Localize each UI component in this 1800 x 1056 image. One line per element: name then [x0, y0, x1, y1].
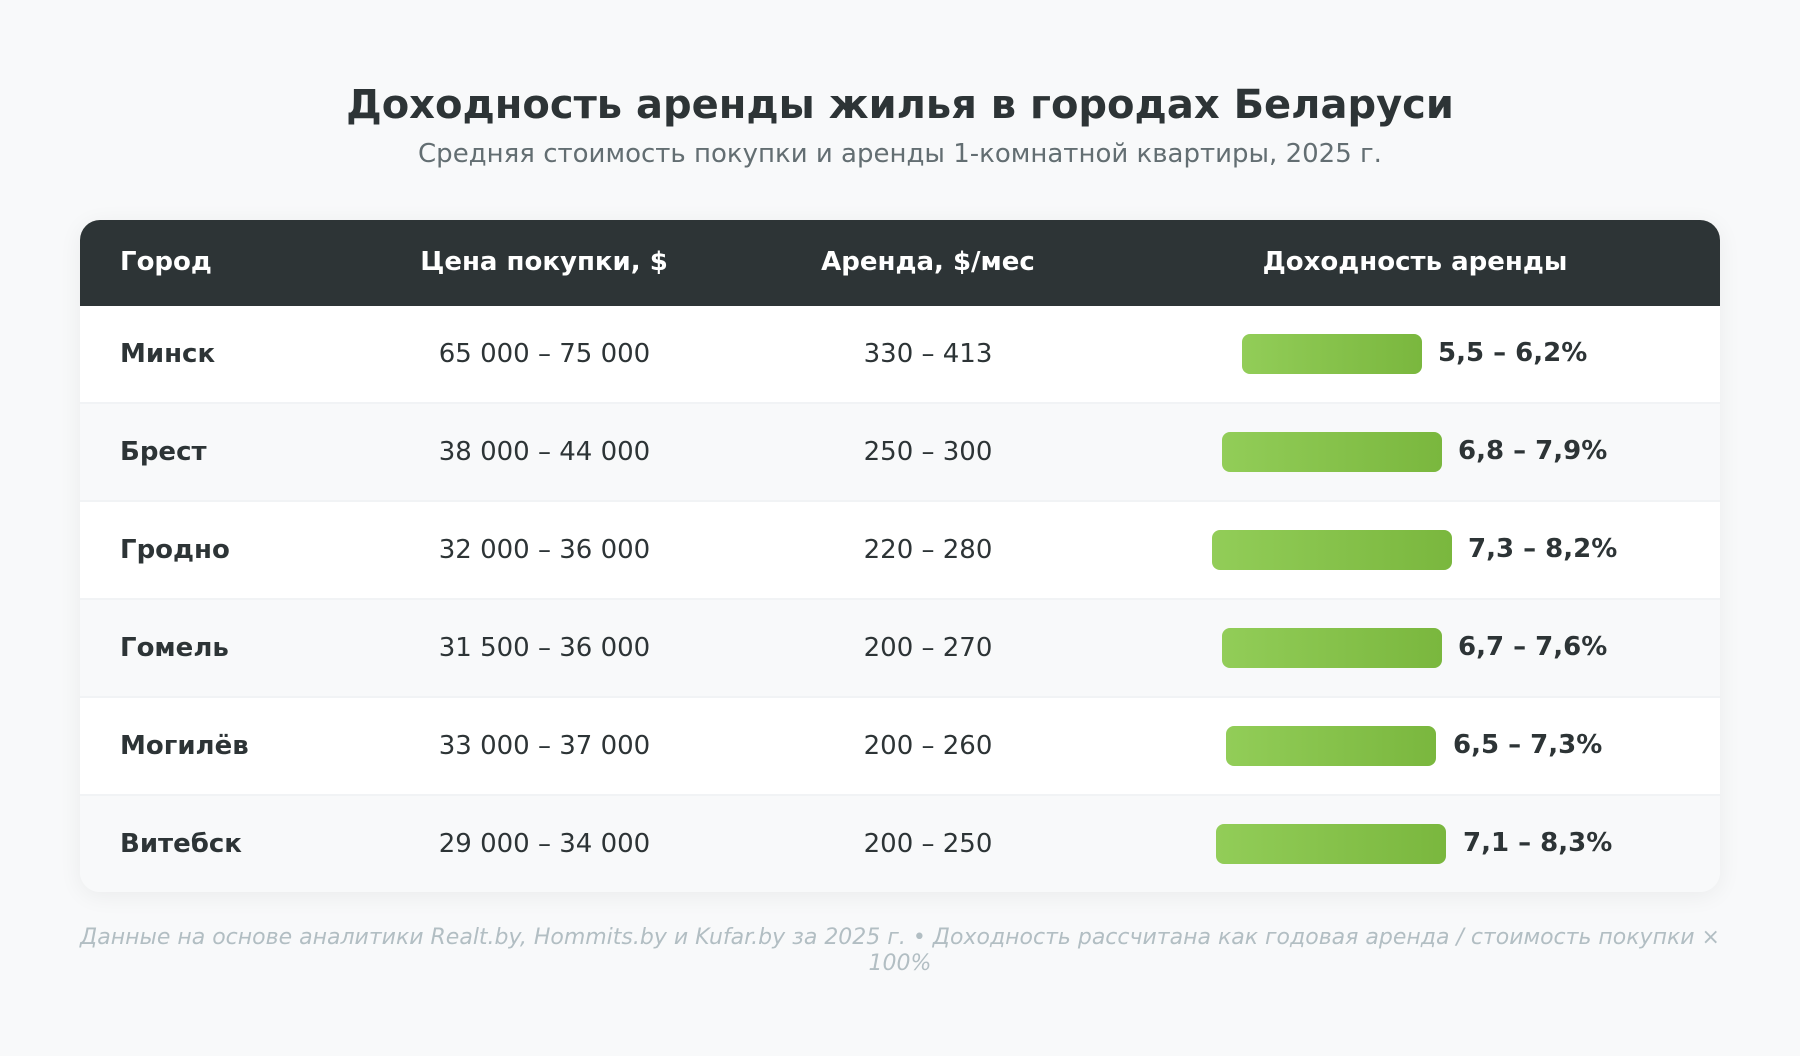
row: Могилёв: 200 – 260 — [864, 731, 992, 761]
row: Гродно: 32 000 – 36 000 — [439, 535, 650, 565]
row: Минск: 330 – 413 — [864, 339, 992, 369]
row: Брест: 250 – 300 — [864, 437, 992, 467]
column heading: purchase price: Цена покупки, $ — [420, 247, 668, 277]
row: Гомель: Гомель — [120, 633, 229, 663]
row: Гродно — [80, 502, 1720, 600]
row: Гомель: 31 500 – 36 000 — [439, 633, 650, 663]
row: Гродно: Гродно — [120, 535, 230, 565]
yield value: Могилёв: 6,5 – 7,3% — [1453, 730, 1602, 760]
panel: rental yield table — [80, 220, 1720, 892]
yield value: Минск: 5,5 – 6,2% — [1438, 338, 1587, 368]
row: Могилёв — [80, 698, 1720, 796]
row: Витебск: Витебск — [120, 829, 242, 859]
yield value: Гомель: 6,7 – 7,6% — [1458, 632, 1607, 662]
yield bar: Минск — [1242, 334, 1422, 374]
row: Брест: Брест — [120, 437, 207, 467]
yield bar: Гомель — [1222, 628, 1442, 668]
row: Минск: 65 000 – 75 000 — [439, 339, 650, 369]
row: Брест: 38 000 – 44 000 — [439, 437, 650, 467]
row: Минск: Минск — [120, 339, 215, 369]
title: Доходность аренды жилья в городах Беларуси — [346, 82, 1454, 128]
yield value: Витебск: 7,1 – 8,3% — [1463, 828, 1612, 858]
yield value: Гродно: 7,3 – 8,2% — [1468, 534, 1617, 564]
yield bar: Могилёв — [1226, 726, 1436, 766]
row: Минск — [80, 306, 1720, 404]
yield bar: Гродно — [1212, 530, 1452, 570]
yield value: Брест: 6,8 – 7,9% — [1458, 436, 1607, 466]
column heading: rent: Аренда, $/мес — [821, 247, 1035, 277]
subtitle: Средняя стоимость покупки и аренды 1-комнатной квартиры, 2025 г. — [418, 139, 1382, 169]
column heading: city: Город — [120, 247, 212, 277]
row: Гомель — [80, 600, 1720, 698]
row: Витебск: 29 000 – 34 000 — [439, 829, 650, 859]
yield bar: Брест — [1222, 432, 1442, 472]
row: Витебск — [80, 796, 1720, 892]
yield bar: Витебск — [1216, 824, 1446, 864]
column heading: yield: Доходность аренды — [1263, 247, 1567, 277]
row: Могилёв: Могилёв — [120, 731, 249, 761]
footnote: Данные на основе аналитики Realt.by, Hommits.by и Kufar.by за 2025 г. • Доходность рассчитана как годовая аренда / стоимость покупки × 100% — [80, 925, 1720, 976]
row: Гродно: 220 – 280 — [864, 535, 992, 565]
row: Витебск: 200 – 250 — [864, 829, 992, 859]
row: Могилёв: 33 000 – 37 000 — [439, 731, 650, 761]
row: Гомель: 200 – 270 — [864, 633, 992, 663]
row: Брест — [80, 404, 1720, 502]
table header row — [80, 220, 1720, 306]
